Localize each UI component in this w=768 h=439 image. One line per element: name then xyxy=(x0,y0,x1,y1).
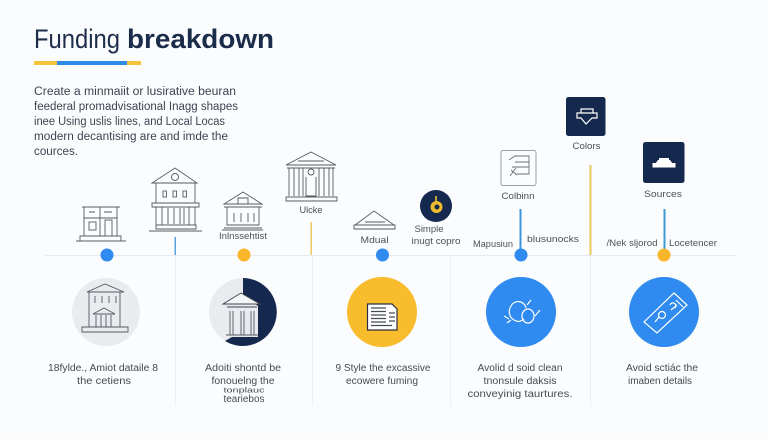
text: column five caption xyxy=(626,363,698,387)
label: blusunocks: blusunocks xyxy=(527,234,579,245)
column dividers xyxy=(175,256,591,406)
title: breakdown xyxy=(127,24,274,54)
text: column three caption xyxy=(336,363,431,387)
text: column five caption: Avoid sctiác the xyxy=(626,363,698,374)
text: column three caption: 9 Style the excassive xyxy=(336,363,431,374)
icon: small office building xyxy=(76,207,126,241)
text: column four caption: tnonsule daksis xyxy=(484,376,556,387)
panel: column five icon xyxy=(629,277,699,347)
connector lines xyxy=(174,165,666,255)
text: column one caption xyxy=(48,363,158,387)
icon: outlined document box xyxy=(501,150,536,186)
text: column four caption: Avolid d soid clean xyxy=(478,363,562,374)
text: column four caption: conveyinig taurtures. xyxy=(468,389,572,400)
intro text: modern decantising are and imde the xyxy=(34,131,228,143)
label: bank: Ulcke xyxy=(300,205,322,216)
label: building three: Inlnssehtist xyxy=(219,231,267,242)
icon: two-storey columned building xyxy=(149,168,202,231)
panel: column three icon xyxy=(347,277,417,347)
label: simple xyxy=(412,224,460,247)
title xyxy=(34,24,274,54)
text: column one caption: the cetiens xyxy=(77,376,131,387)
panel: column one icon xyxy=(72,278,140,346)
icon: roof pediment xyxy=(354,211,395,229)
label: mapusiun: Mapusiun xyxy=(473,239,513,250)
label: colors: Colors xyxy=(572,141,601,152)
text: column two caption: fonouelng the xyxy=(212,376,275,387)
text: column two caption xyxy=(205,363,281,405)
title: Funding xyxy=(34,24,120,54)
label: locetencer: Locetencer xyxy=(669,238,717,249)
text: column one caption: 18fylde., Amiot dataile 8 xyxy=(48,363,158,374)
timeline dots xyxy=(100,248,670,262)
label: sources: Sources xyxy=(644,189,682,200)
icon: navy coin badge xyxy=(420,190,452,222)
label: simple: Simple xyxy=(414,224,444,235)
icon: small pediment building xyxy=(222,192,263,230)
panel: column four icon xyxy=(486,277,556,347)
intro text: Create a minmaiit or lusirative beuran xyxy=(34,86,236,98)
intro text: inee Using uslis lines, and Local Locas xyxy=(34,116,225,128)
text: column two caption: Adoiti shontd be xyxy=(205,363,281,374)
text: column two caption: teariebos xyxy=(224,394,264,405)
label: simple: inugt copro xyxy=(412,236,460,247)
title underline xyxy=(34,61,141,65)
icon: navy colors tile xyxy=(566,97,606,136)
text: column two caption: tonplauc xyxy=(224,388,265,394)
panel: column two icon xyxy=(209,278,277,346)
icon: classical columned bank xyxy=(286,152,337,201)
intro text xyxy=(34,86,238,158)
text: column five caption: imaben details xyxy=(628,376,692,387)
timeline axis xyxy=(45,255,735,256)
intro text: feederal promadvisational Inagg shapes xyxy=(34,101,238,113)
intro text: cources. xyxy=(34,146,78,158)
text: column four caption xyxy=(468,363,572,400)
label: mutual: Mdual xyxy=(360,235,388,246)
label: column: Colbinn xyxy=(502,191,534,202)
label: new stored: /Nek sljorod xyxy=(606,238,658,249)
text: column three caption: ecowere fuming xyxy=(346,376,418,387)
icon: navy sources tile xyxy=(643,142,684,183)
